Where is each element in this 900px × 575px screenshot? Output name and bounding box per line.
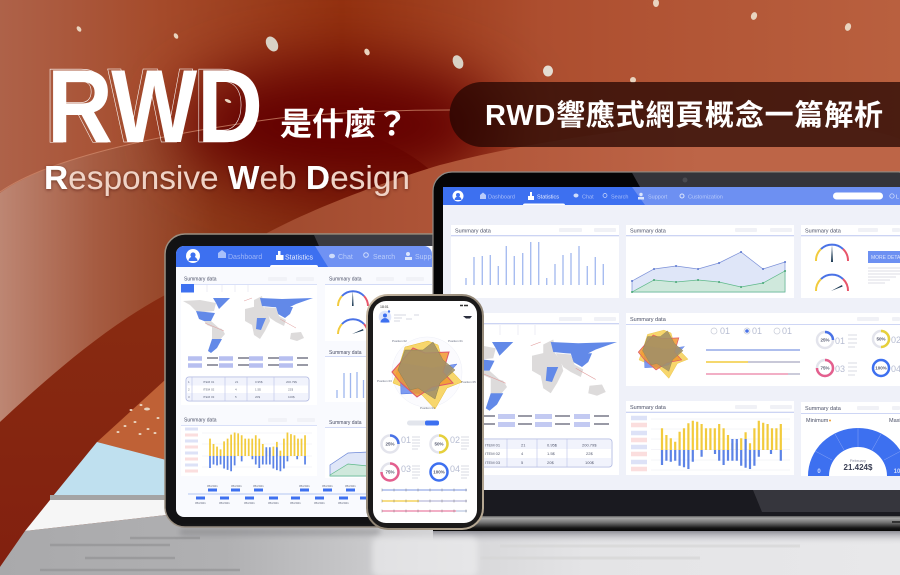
laptop data table: 200.79$ [582,442,597,448]
laptop data table: 100$ [585,460,595,465]
tablet nav bar: Search [373,254,395,261]
phone radar chart: Position 02 [392,339,407,343]
heading: RWD outlined title: RWD [44,47,258,165]
laptop nav bar: Search [611,194,628,200]
tablet panel: bipolar bar chart: Summary data [184,418,217,424]
tablet timeline: 05/2021 [253,484,264,488]
tablet panel: bipolar bar chart [181,418,317,476]
laptop panel: bar chart: Summary data [455,228,492,234]
tablet right column panels: Summary data [329,276,362,282]
phone ring labels: 04 [450,464,460,474]
tablet data table: 3 [188,395,190,399]
tablet data table: 1 [188,380,190,384]
banner text: RWD響應式網頁概念一篇解析 [485,98,883,132]
phone ring 25% [382,436,398,452]
tablet timeline: 05/2021 [290,501,301,505]
phone sliders [382,488,467,512]
ring 25% [817,332,833,348]
tablet right column panels: Summary data [329,420,362,426]
laptop panel: area chart: Summary data [630,228,667,234]
subtitle: Responsive Web Design: Responsive Web Design [44,159,410,196]
phone ring labels [401,435,469,478]
phone ring labels: 03 [401,464,411,474]
tablet timeline: 05/2021 [268,501,279,505]
laptop screen content [443,187,900,476]
laptop nav bar: Customization [688,194,723,200]
tablet data table [186,377,309,401]
phone toggle [407,420,439,426]
tablet nav bar [176,246,440,267]
tablet timeline: 05/2021 [195,501,206,505]
laptop panel: bar chart [451,225,619,298]
device: tablet [165,234,456,527]
phone radar chart: Position 04 [420,406,435,410]
laptop data table: ITEM 03 [485,460,501,465]
tablet timeline: 05/2021 [345,484,356,488]
tablet timeline: 05/2021 [207,484,218,488]
laptop panel: radar, sliders and rings: 01 [720,326,730,336]
laptop data table: 20$ [547,460,554,465]
phone ring 25%: 25% [385,442,395,446]
device: smartphone [367,295,483,529]
phone ring 50%: 50% [434,442,444,446]
phone radar chart: Position 03 [377,379,392,383]
heading: RWD outlined title: RWD [47,49,263,165]
laptop data table: ITEM 02 [485,451,501,456]
tablet data table: 2 [188,388,190,392]
laptop nav bar: Statistics [537,194,559,200]
ring 50%: 50% [876,336,886,342]
device: laptop [433,172,900,531]
tablet data table: 20$ [255,395,260,399]
tablet timeline [188,485,366,504]
phone ring 100%: 100% [433,470,445,474]
laptop panel: radar, sliders and rings: 03 [835,364,845,374]
tablet nav bar: Statistics [285,254,314,262]
tablet data table: 5 [235,395,237,399]
tablet timeline: 05/2021 [299,484,310,488]
laptop data table [470,439,612,467]
laptop panel: world map and table [451,313,619,475]
laptop nav bar: Chat [582,194,594,200]
tablet data table: 1.5$ [255,388,261,392]
laptop nav bar: Dashboard [488,194,515,200]
laptop panel: area chart [626,225,794,298]
ring 25%: 25% [820,338,830,342]
tablet data table: 22$ [288,388,293,392]
tablet nav bar: Dashboard [228,254,262,261]
laptop panel: radar, sliders and rings: Summary data [630,317,667,323]
tablet panel: world map [181,276,317,405]
tablet data table: ITEM 03 [203,395,215,399]
phone ring 75%: 75% [385,470,395,474]
heading: 是什麼？: 是什麼？ [280,106,408,142]
tablet nav bar: Chat [338,254,353,261]
banner: dark pill [450,82,900,147]
laptop panel: half-donut gauge: Minimum [806,418,829,424]
laptop panel: half-donut gauge: Summary data [805,406,842,412]
phone status bar and profile: 18:01 [380,305,389,309]
laptop panel: radar, sliders and rings: 01 [782,326,792,336]
phone ring 50% [430,436,448,452]
laptop panel: gauges: Summary data [805,228,842,234]
tablet panel: world map: Summary data [184,276,217,282]
tablet data table: ITEM 01 [203,380,215,384]
tablet data table: ITEM 02 [203,388,215,392]
laptop data table: 1.5$ [547,451,556,456]
floor shadow and phone reflection [180,529,900,575]
laptop panel: half-donut gauge: 0 [817,469,821,475]
tablet timeline: 05/2021 [244,501,255,505]
ring 100%: 100% [875,366,887,370]
laptop data table: 5 [521,460,524,465]
laptop data table: 21 [521,442,526,448]
tablet screen content [176,246,440,505]
tablet data table: 200.79$ [286,380,297,384]
laptop data table: 22$ [586,451,593,456]
phone ring 75% [382,464,398,480]
tablet timeline: 05/2021 [338,501,349,505]
tablet data table: 100$ [288,395,295,399]
phone ring labels: 02 [450,435,460,445]
tablet timeline: 05/2021 [314,501,325,505]
phone ring labels: 01 [401,435,411,445]
tablet timeline: 05/2021 [231,484,242,488]
ring 100% [873,360,889,376]
laptop data table: ITEM 01 [485,442,501,448]
tablet timeline: 05/2021 [322,484,333,488]
ring 75%: 75% [820,366,830,370]
phone radar chart: Position 01 [448,339,463,343]
laptop nav bar: Support [648,194,668,200]
phone ring 100% [430,464,448,480]
laptop panel: gauges [801,225,900,298]
laptop panel: half-donut gauge [801,402,900,476]
laptop panel: half-donut gauge: February [850,458,866,463]
tablet right column panels [325,276,432,478]
laptop data table: 0.95$ [547,442,558,448]
laptop panel: half-donut gauge: 21.424$ [844,463,873,472]
tablet data table: 4 [235,388,237,392]
tablet nav bar: Support [415,254,440,261]
ring 50% [873,331,889,347]
ring 75% [817,360,833,376]
phone radar chart: Position 05 [461,380,476,384]
tablet timeline: 05/2021 [219,501,230,505]
tablet right column panels: Summary data [329,350,362,356]
tablet data table: 21 [235,380,239,384]
laptop nav bar: L [896,194,899,200]
laptop panel: radar, sliders and rings: 01 [835,336,845,346]
laptop panel: radar, sliders and rings: 01 [752,326,762,336]
laptop panel: bipolar bar chart: Summary data [630,405,667,411]
tablet data table: 0.95$ [255,380,263,384]
phone radar chart [377,337,476,410]
laptop nav bar [443,187,900,205]
laptop panel: radar, sliders and rings [626,313,900,386]
laptop data table: 4 [521,451,524,456]
laptop panel: bipolar bar chart [626,401,794,475]
phone status bar and profile [379,305,472,323]
